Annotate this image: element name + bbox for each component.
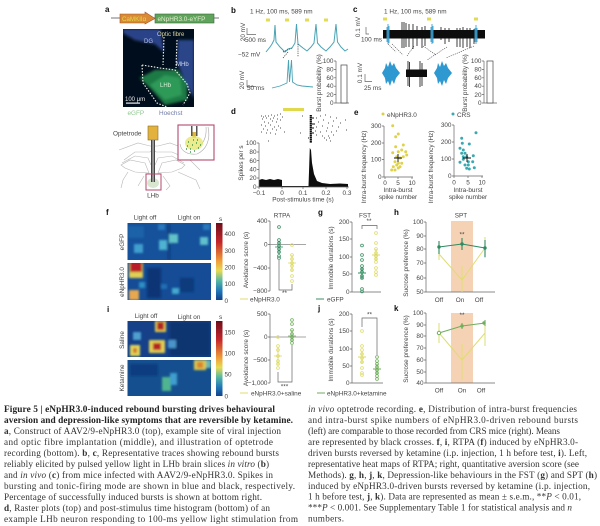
label a: a [105, 5, 110, 14]
panel k: sucrose preference chart: 50 [416, 369, 424, 376]
scatter: eNpHR3.0: 300 [371, 123, 382, 130]
panel h: SPT chart: Off [475, 297, 483, 304]
post-stimulus time histogram: Spikes per s [238, 145, 245, 181]
brain section with optetrode: Optetrode [113, 130, 142, 138]
panel e: scatter plots [354, 108, 488, 203]
burst probability bar chart: Burst probability (%) [316, 54, 323, 112]
panel j: immobile duration chart: 50 [342, 363, 350, 370]
panel c: rebound bursts in vivo: c [353, 5, 358, 14]
caption: left column: and in vivo (c) from mice infected with AAV2/9-eNpHR3.0. Spikes in [4, 470, 273, 480]
legend: eNpHR3.0 [387, 112, 417, 119]
colour bar: 100 [224, 350, 236, 358]
zoomed burst trace [239, 60, 313, 92]
heat map: eGFP [127, 223, 211, 260]
panel f: RTPA heat maps: f [106, 208, 109, 217]
post-stimulus time histogram: 20 [249, 175, 257, 182]
post-stimulus time histogram: 80 [249, 149, 257, 156]
colour bar: 300 [224, 248, 236, 255]
post-stimulus time histogram: 0.1 [299, 190, 308, 197]
scatter: eNpHR3.0: 5 [396, 180, 400, 187]
panel b: rebound bursts in vitro [231, 6, 349, 112]
panel i: avoidance score chart: Avoidance score (s) [243, 330, 250, 386]
histology image: 100 μm [125, 97, 145, 103]
colour bar: 50 [224, 372, 232, 378]
panel f: RTPA heat maps: Light off [134, 214, 157, 222]
post-stimulus time histogram: 60 [249, 158, 257, 165]
panel f: avoidance score chart [240, 212, 306, 304]
scatter: CRS: spike number [449, 194, 488, 201]
burst probability bar chart [316, 54, 349, 112]
panel i: avoidance score chart: 0 [264, 334, 268, 341]
scatter: CRS: 300 [441, 122, 452, 129]
panel g: FST chart: eGFP [327, 296, 344, 304]
caption: left column: aversion and depression-like symptoms that are reversible by ketamine. [4, 416, 293, 426]
post-stimulus time histogram [238, 140, 352, 204]
colour bar: 150 [224, 330, 236, 336]
panel k: sucrose preference chart: k [394, 304, 399, 313]
caption: right column [308, 404, 597, 524]
construct diagram [111, 12, 219, 24]
scatter: CRS: Intra-burst frequency (Hz) [428, 131, 435, 203]
panel f: avoidance score chart: ** [282, 290, 287, 297]
scatter: CRS: Intra-burst [453, 187, 483, 194]
legend [382, 112, 470, 119]
panel g: FST chart: 50 [342, 271, 350, 278]
inset of LHb [178, 125, 214, 160]
panel f: RTPA heat maps: Light on [178, 214, 201, 222]
colour bar: 400 [224, 231, 236, 238]
construct diagram: CaMKIIα [122, 16, 147, 23]
histology image: DG [144, 39, 153, 45]
extracellular trace: 0.1 mV [355, 16, 362, 37]
scatter: eNpHR3.0: 100 [371, 156, 382, 164]
scatter: eNpHR3.0: 0 [378, 174, 382, 181]
panel k: sucrose preference chart: Off [477, 388, 485, 394]
panel f: avoidance score chart: RTPA [274, 212, 291, 220]
panel k: sucrose preference chart: 40 [416, 380, 424, 387]
panel j: immobile duration chart: eNpHR3.0+ketamine [327, 390, 387, 398]
panel i: avoidance score chart: 500 [257, 311, 268, 318]
panel k: sucrose preference chart: Off [435, 388, 443, 394]
post-stimulus time histogram: 100 [246, 140, 257, 147]
scatter: CRS: 5 [466, 180, 470, 186]
burst probability bar chart [462, 54, 497, 112]
panel h: SPT chart: 50 [416, 289, 424, 296]
colour bar: 0 [224, 298, 228, 305]
colour bar: s [219, 314, 222, 321]
panel i: RTPA heat maps under ketamine: Light off [135, 313, 158, 320]
scale bar and labels: −52 mV [238, 52, 261, 58]
histology legend: eGFP [128, 110, 144, 117]
construct diagram: eNpHR3.0-eYFP [158, 16, 205, 23]
scatter: eNpHR3.0: Intra-burst frequency (Hz) [361, 131, 368, 203]
panel g: FST chart: 200 [339, 219, 350, 226]
caption: right column: (left) are comparable to those recorded from CRS mice (right). Means [308, 426, 560, 436]
panel j: immobile duration chart: j [317, 304, 320, 313]
stimulus bar [283, 108, 304, 111]
burst probability bar chart: 100 [471, 58, 482, 65]
post-stimulus time histogram: 0.2 [322, 190, 331, 197]
scale bar and labels: 20 mV [240, 22, 247, 41]
caption: right column: 1 h before test, j, k). Data are represented as mean ± s.e.m., **P < 0.01, [308, 492, 581, 502]
panel i: RTPA heat maps under ketamine: Ketamine [119, 364, 126, 392]
panel f: RTPA heat maps: eGFP [119, 234, 126, 250]
light pulses [266, 18, 328, 22]
panel g: FST chart: 100 [339, 254, 350, 261]
panel d: raster and histogram [231, 107, 352, 204]
caption: right column: Methods). g, h, j, k, Depression-like behaviours in the FST (g) and SPT (h) [308, 470, 597, 480]
heat map: eNpHR3.0 [127, 261, 211, 300]
heat map: saline [127, 321, 211, 357]
scatter: eNpHR3.0: 10 [408, 180, 416, 187]
panel g: FST chart: 0 [346, 289, 350, 296]
panel f: avoidance score chart: 0 [264, 242, 268, 248]
caption: left column: example LHb neuron responding to 100-ms yellow light stimulation from [4, 514, 298, 524]
panel k: sucrose preference chart [394, 304, 495, 394]
colour bar: 100 [224, 281, 236, 288]
colour bar [216, 314, 236, 400]
panel h: SPT chart: h [394, 208, 399, 217]
panel h: SPT chart: Sucrose preference (%) [403, 229, 410, 297]
panel h: SPT chart: 70 [416, 260, 424, 267]
panel k: sucrose preference chart: 60 [416, 357, 424, 364]
scatter: eNpHR3.0: 0 [383, 180, 387, 187]
panel k: sucrose preference chart: 90 [416, 322, 424, 329]
panel h: SPT chart: ** [460, 232, 465, 238]
panel f: avoidance score chart: eNpHR3.0 [250, 296, 280, 304]
post-stimulus time histogram: 0 [253, 184, 257, 191]
panel g: FST chart [316, 208, 381, 304]
panel f: avoidance score chart: −400 [253, 265, 268, 272]
panel i: avoidance score chart [240, 311, 306, 398]
panel k: sucrose preference chart: 100 [413, 310, 424, 317]
caption: right column: are represented by black crosses. f, i, RTPA (f) induced by eNpHR3.0- [308, 437, 578, 447]
light pulses [383, 18, 478, 20]
burst probability bar chart: 40 [326, 83, 334, 90]
zoomed burst trace: 20 mV [239, 70, 246, 89]
panel e: scatter plots: e [354, 108, 359, 117]
zoomed burst trace: 50 ms [247, 85, 264, 92]
panel k: sucrose preference chart: ** [460, 312, 465, 319]
caption: right column: ***P < 0.001. See Supplementary Table 1 for statistical analysis and n [308, 502, 572, 512]
panel i: avoidance score chart: eNpHR3.0+saline [251, 390, 302, 398]
post-stimulus time histogram: −0.1 [253, 190, 266, 197]
panel b: rebound bursts in vitro: 1 Hz, 100 ms, 589 nm [250, 8, 313, 16]
colour bar: s [219, 216, 222, 223]
caption: right column: induced by eNpHR3.0-driven bursts reversed by ketamine (i.p. injection, [308, 481, 590, 491]
burst probability bar chart: Burst probability (%) [462, 54, 469, 112]
burst probability bar chart: 60 [326, 75, 334, 82]
legend: CRS [457, 112, 470, 119]
scatter: CRS: 0 [448, 173, 452, 180]
histology legend [128, 110, 183, 117]
panel h: SPT chart: 90 [416, 233, 424, 240]
scatter: CRS: 10 [478, 180, 486, 186]
panel h: SPT chart: Off [435, 297, 443, 304]
panel i: avoidance score chart: −1,000 [248, 380, 268, 387]
panel h: SPT chart: 100 [413, 219, 424, 226]
heat map: ketamine [127, 360, 211, 396]
panel k: sucrose preference chart: 80 [416, 333, 424, 340]
scatter: CRS: 200 [441, 139, 452, 146]
caption: right column: in vivo optetrode recording. e, Distribution of intra-burst frequencies [308, 404, 577, 414]
colour bar [216, 216, 236, 305]
panel h: SPT chart: 80 [416, 246, 424, 253]
panel j: immobile duration chart: 200 [339, 311, 350, 318]
scale bar and labels [238, 22, 266, 58]
burst probability bar chart: 60 [474, 75, 482, 82]
panel f: avoidance score chart: 400 [257, 218, 268, 225]
caption: right column: representative heat maps of RTPA; right, quantitative aversion score (see [308, 459, 579, 469]
caption: right column: and intra-burst spike numbers of eNpHR3.0-driven rebound bursts [308, 415, 578, 425]
scatter: CRS [428, 122, 488, 203]
panel g: FST chart: Immobile durations (s) [328, 226, 335, 290]
scatter: eNpHR3.0: 200 [371, 140, 382, 147]
panel h: SPT chart: SPT [455, 212, 467, 220]
black segment and dashed connectors [283, 44, 298, 58]
histology legend: Hoechst [159, 110, 183, 117]
burst probability bar chart: 80 [326, 66, 334, 74]
brain section with optetrode: LHb [147, 192, 159, 200]
panel i: RTPA heat maps under ketamine: Light on [178, 314, 201, 321]
panel f: avoidance score chart: −800 [253, 288, 268, 295]
extracellular trace [355, 16, 485, 60]
caption: right column: driven bursts reversed by ketamine (i.p. injection, 1 h before test, i). Left, [308, 448, 587, 458]
panel h: SPT chart [394, 208, 495, 304]
panel k: sucrose preference chart: 70 [416, 345, 424, 352]
caption: left column: d, Raster plots (top) and post-stimulus time histogram (bottom) of an [4, 503, 270, 513]
caption: left column: recording (bottom). b, c, Representative traces showing rebound bursts [4, 448, 279, 458]
burst probability bar chart: 0 [478, 100, 482, 107]
panel d: raster and histogram: d [231, 107, 236, 116]
caption: left column: a, Construct of AAV2/9-eNpHR3.0 (top), example site of viral injection [4, 426, 281, 436]
zoomed spikes: 0.1 mV [357, 62, 364, 83]
caption: left column: and optic fibre implantation (middle), and illustration of optetrode [4, 437, 273, 447]
panel j: immobile duration chart: Immobile durations (s) [328, 318, 335, 382]
scatter: CRS: 100 [441, 156, 452, 163]
panel h: SPT chart: On [456, 297, 465, 304]
histology image [123, 29, 194, 107]
panel i: avoidance score chart: −500 [253, 357, 268, 364]
panel j: immobile duration chart: 100 [339, 346, 350, 353]
panel g: FST chart: g [318, 208, 323, 217]
zoomed spikes [357, 61, 452, 92]
caption: left column: bursting and tonic-firing mode are shown in blue and black, respectively. [4, 481, 295, 491]
panel a: construct, histology and optetrode [105, 5, 219, 200]
burst probability bar chart: 100 [323, 58, 334, 65]
panel f: RTPA heat maps [106, 208, 236, 305]
colour bar: 200 [224, 264, 236, 272]
panel b: rebound bursts in vitro: b [231, 6, 236, 15]
caption: left column: Percentage of successfully induced bursts is shown at bottom right. [4, 492, 262, 502]
burst probability bar chart: 0 [330, 100, 334, 107]
membrane potential trace [266, 24, 348, 52]
post-stimulus time histogram: 40 [249, 166, 257, 174]
burst probability bar chart: 80 [474, 66, 482, 74]
panel h: SPT chart: 60 [416, 275, 424, 282]
burst probability bar chart: 40 [474, 83, 482, 90]
scatter: CRS: 0 [452, 180, 456, 186]
extracellular trace: 100 ms [361, 36, 382, 44]
post-stimulus time histogram: 0.3 [343, 190, 352, 197]
panel f: avoidance score chart: Avoidance score (s) [243, 232, 250, 288]
brain section with optetrode [113, 126, 200, 200]
histology image: MHb [176, 62, 189, 68]
scatter: eNpHR3.0: spike number [379, 194, 418, 201]
raster plot [261, 114, 347, 143]
colour bar: 0 [224, 394, 228, 400]
scatter: eNpHR3.0: Intra-burst [383, 187, 413, 194]
panel k: sucrose preference chart: Sucrose preference (%) [403, 315, 410, 383]
panel c: rebound bursts in vivo [353, 5, 497, 112]
panel j: immobile duration chart: ** [367, 312, 372, 318]
scatter: eNpHR3.0 [361, 123, 418, 203]
panel i: RTPA heat maps under ketamine [107, 305, 236, 400]
histology image: Optic fibre [157, 32, 185, 38]
burst probability bar chart: 20 [474, 92, 482, 99]
zoomed spikes: 25 ms [364, 85, 381, 92]
burst probability bar chart: 20 [326, 92, 334, 99]
panel i: RTPA heat maps under ketamine: i [107, 305, 109, 314]
caption: left column [4, 405, 298, 524]
scale bar and labels: 500 ms [245, 37, 266, 44]
post-stimulus time histogram: Post-stimulus time (s) [272, 196, 334, 204]
panel j: immobile duration chart [317, 304, 387, 398]
panel k: sucrose preference chart: On [458, 388, 467, 394]
panel j: immobile duration chart: 150 [339, 328, 350, 335]
panel i: avoidance score chart: *** [281, 384, 289, 390]
histology image: LHb [160, 83, 172, 89]
post-stimulus time histogram: 0 [280, 190, 284, 197]
panel g: FST chart: 150 [339, 236, 350, 243]
panel c: rebound bursts in vivo: 1 Hz, 100 ms, 589 nm [384, 8, 447, 16]
caption: left column: Figure 5 | eNpHR3.0-induced rebound bursting drives behavioural [4, 405, 275, 415]
panel j: immobile duration chart: 0 [346, 380, 350, 387]
caption: left column: reliably elicited by pulsed yellow light in LHb brain slices in vitro (b) [4, 459, 269, 469]
panel i: RTPA heat maps under ketamine: Saline [119, 331, 126, 349]
panel g: FST chart: ** [367, 218, 372, 225]
caption: right column: numbers. [308, 514, 344, 524]
panel f: RTPA heat maps: eNpHR3.0 [119, 267, 126, 297]
panel g: FST chart: FST [359, 212, 371, 220]
